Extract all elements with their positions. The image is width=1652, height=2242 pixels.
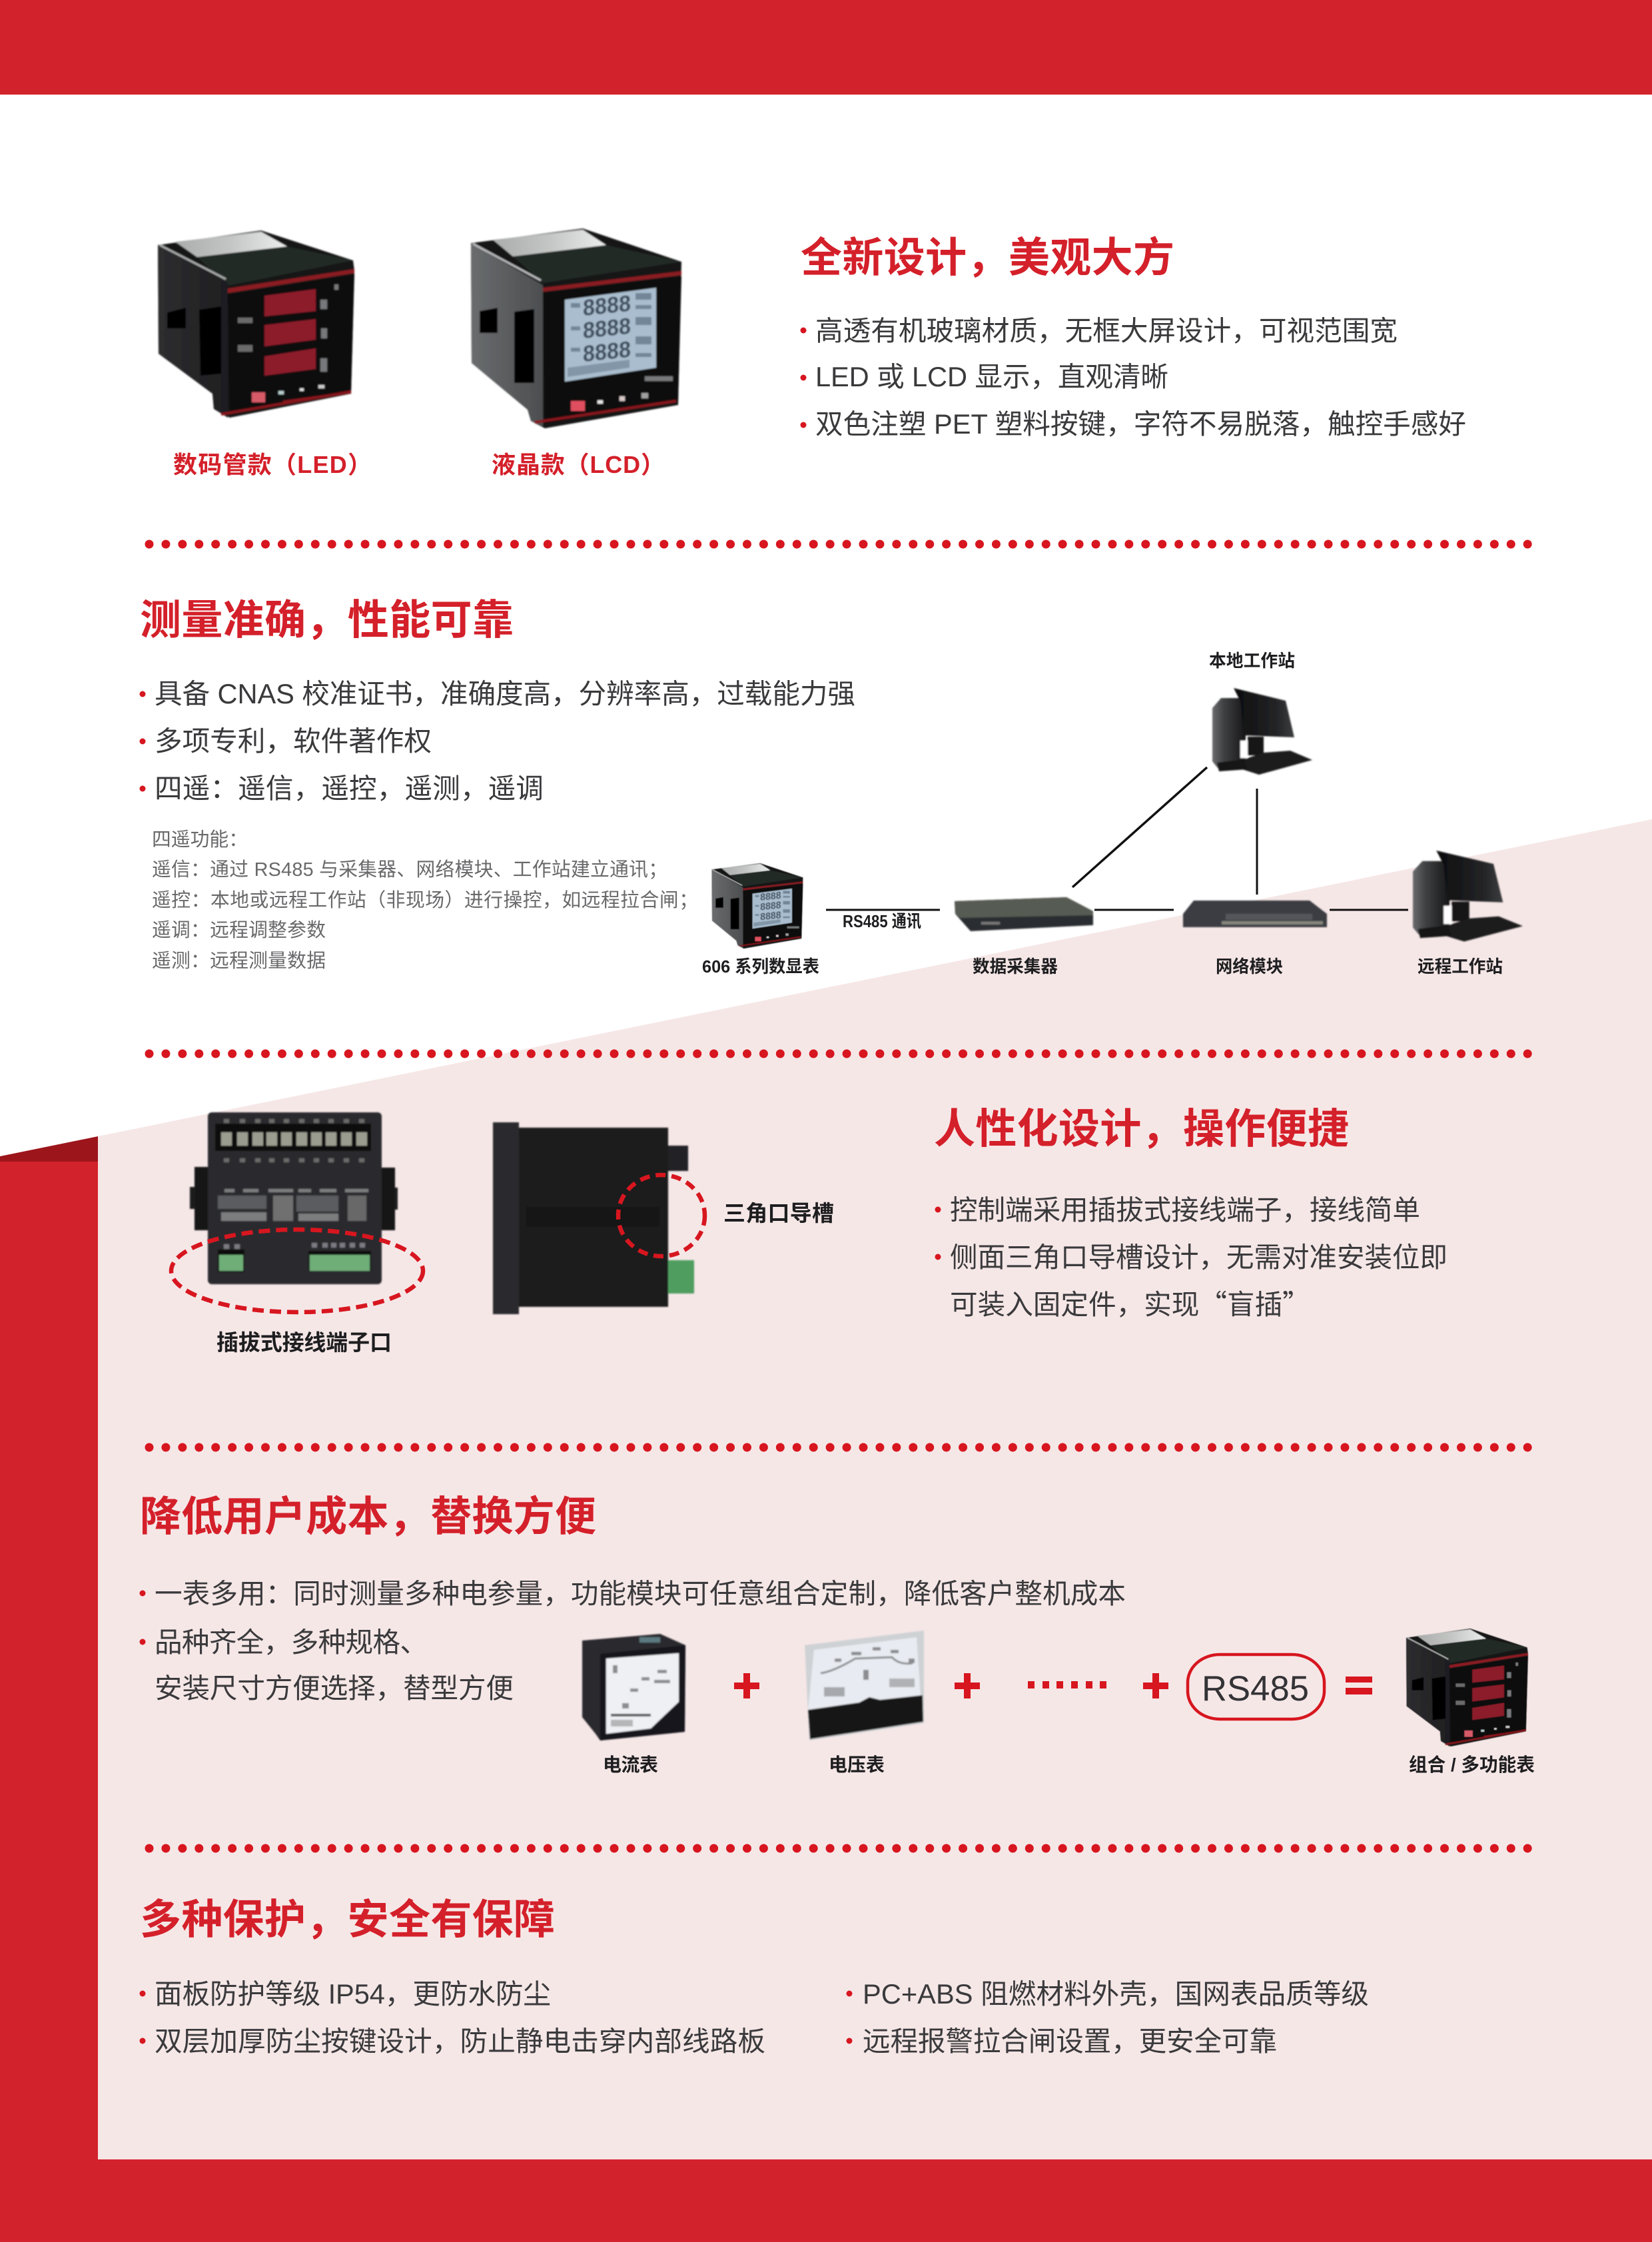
- label: voltmeter: 电压表: [829, 1754, 885, 1775]
- feature list: left column: 面板防护等级 IP54，更防水防尘: [155, 1978, 551, 2010]
- icon: meter side view: [493, 1122, 694, 1314]
- callout: plug-in terminal ellipse: [171, 1230, 423, 1312]
- RS485 pill: RS485: [1202, 1669, 1309, 1708]
- feature list: accurate measurement: 具备 CNAS 校准证书，准确度高，分辨率高，过载能力强: [155, 678, 855, 709]
- feature list: new design: [801, 315, 1466, 440]
- panel: lower user costs: [140, 1494, 1535, 1775]
- feature list: left column: [140, 1978, 765, 2057]
- feature list: new design: 高透有机玻璃材质，无框大屏设计，可视范围宽: [815, 315, 1398, 346]
- label: network module: 网络模块: [1216, 956, 1283, 976]
- label: ammeter: 电流表: [603, 1754, 658, 1775]
- text block: four remote functions: 遥调：远程调整参数: [152, 920, 326, 941]
- arrow: network module to remote workstation: [1330, 909, 1408, 911]
- text block: four remote functions: 遥测：远程测量数据: [152, 950, 326, 972]
- label: LCD model: 液晶款（LCD）: [492, 451, 665, 478]
- icon: meter rear with terminals: [190, 1112, 398, 1284]
- icon: data collector: [955, 897, 1093, 931]
- panel: user friendly design: [171, 1106, 1447, 1355]
- label: RS485 link: RS485 通讯: [843, 911, 921, 931]
- feature list: right column: [846, 1978, 1369, 2057]
- icon: network module: [1183, 901, 1327, 927]
- label: local workstation: 本地工作站: [1209, 651, 1295, 671]
- icon: voltmeter: [805, 1631, 924, 1740]
- text block: four remote functions: 四遥功能：: [152, 829, 248, 851]
- icon: plus: [734, 1673, 759, 1698]
- feature list: accurate measurement: [140, 678, 855, 804]
- RS485 pill: [1188, 1655, 1324, 1719]
- feature list: user friendly design: 侧面三角口导槽设计，无需对准安装位即: [950, 1242, 1447, 1273]
- icon: 606 series meter: [712, 863, 803, 948]
- icon: LCD meter: [471, 228, 681, 428]
- network diagram: [702, 651, 1523, 976]
- icon: LED meter: [158, 230, 354, 418]
- text block: four remote functions: [152, 829, 698, 972]
- equation diagram: [582, 1629, 1535, 1775]
- icon: combined meter: [1406, 1629, 1528, 1746]
- feature list: right column: PC+ABS 阻燃材料外壳，国网表品质等级: [863, 1978, 1369, 2010]
- icon: remote workstation: [1413, 851, 1523, 942]
- feature list: left column: 双层加厚防尘按键设计，防止静电击穿内部线路板: [155, 2026, 765, 2057]
- arrow: collector to network module: [1094, 909, 1174, 911]
- heading: new design: 全新设计，美观大方: [801, 235, 1174, 281]
- feature list: user friendly design: 可装入固定件，实现“盲插”: [950, 1282, 1310, 1322]
- icon: plus: [955, 1673, 980, 1698]
- feature list: user friendly design: [935, 1194, 1447, 1322]
- label: data collector: 数据采集器: [973, 956, 1058, 976]
- feature list: lower user costs: 安装尺寸方便选择，替型方便: [155, 1673, 514, 1704]
- feature list: new design: LED 或 LCD 显示，直观清晰: [815, 361, 1168, 392]
- icon: ellipsis dots: [1028, 1681, 1106, 1688]
- panel: multiple protections: [140, 1897, 1369, 2057]
- feature list: lower user costs: 品种齐全，多种规格、: [155, 1627, 428, 1658]
- heading: lower user costs: 降低用户成本，替换方便: [140, 1494, 596, 1540]
- label: LED model: 数码管款（LED）: [173, 451, 372, 478]
- icon: local workstation: [1212, 688, 1312, 775]
- icon: plus: [1143, 1673, 1168, 1698]
- arrow: collector to local workstation: [1072, 767, 1207, 887]
- arrow: RS485 link: [826, 909, 940, 911]
- label: triangular slot: 三角口导槽: [723, 1201, 834, 1226]
- bottom red bar: [0, 2159, 1652, 2242]
- dark red fold triangle: [0, 1136, 98, 1162]
- callout: triangular slot ellipse: [618, 1175, 705, 1256]
- red left band: [0, 1162, 98, 2161]
- heading: multiple protections: 多种保护，安全有保障: [140, 1897, 555, 1943]
- feature list: accurate measurement: 多项专利，软件著作权: [155, 725, 432, 757]
- panel: accurate measurement: [140, 597, 1523, 976]
- label: 606 series meter: 606 系列数显表: [702, 956, 819, 976]
- arrow: network module to local workstation: [1256, 789, 1258, 895]
- text block: four remote functions: 遥信：通过 RS485 与采集器、网络模块、工作站建立通讯；: [152, 859, 667, 881]
- heading: accurate measurement: 测量准确，性能可靠: [140, 597, 514, 643]
- top red bar: [0, 0, 1652, 95]
- label: plug-in terminal: 插拔式接线端子口: [216, 1330, 392, 1355]
- feature list: right column: 远程报警拉合闸设置，更安全可靠: [863, 2026, 1277, 2057]
- feature list: new design: 双色注塑 PET 塑料按键，字符不易脱落，触控手感好: [815, 408, 1466, 440]
- feature list: lower user costs: 一表多用：同时测量多种电参量，功能模块可任意组合定制，降低客户整机成本: [155, 1578, 1126, 1609]
- label: combined meter: 组合 / 多功能表: [1409, 1754, 1535, 1775]
- heading: user friendly design: 人性化设计，操作便捷: [934, 1106, 1349, 1152]
- feature list: user friendly design: 控制端采用插拔式接线端子，接线简单: [950, 1194, 1420, 1226]
- icon: equals: [1346, 1677, 1372, 1694]
- text block: four remote functions: 遥控：本地或远程工作站（非现场）进行操控，如远程拉合闸；: [152, 890, 698, 911]
- panel: new design: [158, 228, 1466, 478]
- label: remote workstation: 远程工作站: [1418, 956, 1503, 976]
- icon: ammeter: [582, 1634, 685, 1740]
- pink diagonal background panel: [98, 819, 1652, 2159]
- feature list: accurate measurement: 四遥：遥信，遥控，遥测，遥调: [155, 773, 544, 804]
- feature list: lower user costs: [140, 1578, 1126, 1704]
